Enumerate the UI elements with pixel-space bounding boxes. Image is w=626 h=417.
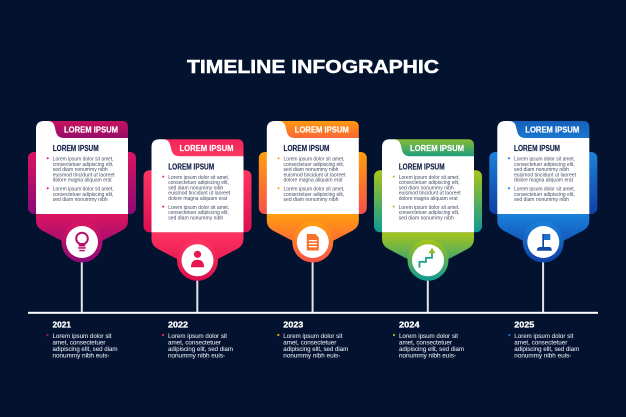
- panel: card 2: [144, 139, 252, 312]
- bullet text 3: consectetuer adipiscing elit,: [284, 192, 344, 198]
- bullet text 4: dolore magna aliquam erat: [399, 196, 458, 202]
- year block 2021: Lorem ipsum dolor sit: [52, 333, 112, 340]
- bullet text 4: [393, 175, 461, 221]
- subheading 1: LOREM IPSUM: [53, 144, 99, 153]
- bullet text 1: consectetuer adipiscing elit,: [53, 192, 113, 198]
- bullet text 1: [47, 157, 115, 203]
- subheading 3: LOREM IPSUM: [284, 144, 330, 153]
- bullet text 2: Lorem ipsum dolor sit amet,: [168, 175, 229, 181]
- year block 2024: nonummy nibh euis-: [399, 352, 456, 359]
- bullet text 2: dolore magna aliquam erat: [168, 196, 228, 202]
- bullet text 2: [162, 175, 231, 221]
- bullet text 5: Lorem ipsum dolor sit amet,: [514, 187, 575, 193]
- year block 2023: 2023: [283, 320, 304, 330]
- lower body 4: [382, 232, 474, 275]
- bullet text 5: consectetuer adipiscing elit,: [514, 192, 575, 198]
- year block 2021: [46, 320, 118, 359]
- icon: light bulb: [62, 222, 102, 262]
- timeline axis: [28, 312, 598, 314]
- year block 2024: adipiscing elit, sed diam: [399, 346, 464, 353]
- year block 2024: Lorem ipsum dolor sit: [399, 333, 458, 340]
- year block 2025: adipiscing elit, sed diam: [514, 346, 579, 353]
- bullet text 4: Lorem ipsum dolor sit amet,: [399, 175, 460, 181]
- year block 2023: Lorem ipsum dolor sit: [283, 333, 343, 340]
- white card 2: [152, 139, 244, 232]
- header label 5: LOREM IPSUM: [525, 125, 579, 135]
- bullet text 2: Lorem ipsum dolor sit amet,: [168, 205, 229, 211]
- year block 2024: amet, consectetuer: [399, 339, 452, 346]
- year block 2023: amet, consectetuer: [283, 339, 336, 346]
- year block 2025: amet, consectetuer: [514, 339, 567, 346]
- year block 2021: amet, consectetuer: [52, 339, 106, 346]
- year block 2025: nonummy nibh euis-: [514, 352, 571, 359]
- header tab 5: [509, 121, 589, 140]
- bullet text 3: sed diam nonummy nibh: [284, 167, 339, 173]
- lower body 5: [497, 214, 589, 257]
- bullet text 2: euismod tincidunt ut laoreet: [168, 191, 231, 197]
- bullet text 1: Lorem ipsum dolor sit amet,: [53, 157, 114, 163]
- side panel 2: [144, 170, 252, 232]
- side panel 4: [374, 170, 482, 232]
- bullet text 5: euismod tincidunt ut laoreet: [514, 172, 577, 178]
- bullet text 1: dolore magna aliquam erat: [53, 178, 112, 184]
- icon: rising stairs arrow: [408, 240, 448, 281]
- bullet text 1: sed diam nonummy nibh: [53, 197, 108, 203]
- header label 3: LOREM IPSUM: [295, 125, 349, 135]
- year block 2022: adipiscing elit, sed diam: [168, 346, 233, 353]
- bullet text 5: consectetuer adipiscing elit,: [514, 162, 575, 168]
- year block 2022: nonummy nibh euis-: [168, 352, 225, 359]
- year block 2024: [393, 320, 464, 359]
- bullet text 1: euismod tincidunt ut laoreet: [53, 172, 115, 178]
- bullet text 2: sed diam nonummy nibh: [168, 185, 223, 191]
- bullet text 3: dolore magna aliquam erat: [284, 178, 343, 184]
- bullet text 1: sed diam nonummy nibh: [53, 167, 108, 173]
- panel: card 3: [259, 121, 367, 312]
- white card 4: [382, 139, 474, 232]
- white card 3: [267, 121, 359, 214]
- bullet text 2: consectetuer adipiscing elit,: [168, 180, 229, 186]
- icon: flag: [523, 222, 564, 262]
- year block 2022: Lorem ipsum dolor sit: [168, 333, 227, 340]
- connector line 4: [427, 276, 429, 312]
- bullet text 3: consectetuer adipiscing elit,: [284, 162, 344, 168]
- title: TIMELINE INFOGRAPHIC: [187, 56, 439, 77]
- white card 5: [497, 121, 589, 214]
- header label 1: LOREM IPSUM: [64, 125, 118, 135]
- header label 2: LOREM IPSUM: [180, 143, 234, 153]
- header tab 2: [164, 139, 244, 158]
- bullet text 3: Lorem ipsum dolor sit amet,: [284, 187, 344, 193]
- year block 2021: 2021: [52, 320, 71, 330]
- subheading 5: LOREM IPSUM: [514, 144, 560, 153]
- bullet text 4: Lorem ipsum dolor sit amet,: [399, 205, 460, 211]
- bullet text 4: euismod tincidunt ut laoreet: [399, 191, 461, 197]
- bullet text 3: sed diam nonummy nibh: [284, 197, 339, 203]
- header tab 4: [394, 139, 474, 158]
- connector line 5: [542, 258, 544, 312]
- year block 2025: Lorem ipsum dolor sit: [514, 333, 574, 340]
- bullet text 3: Lorem ipsum dolor sit amet,: [284, 157, 344, 163]
- year block 2022: 2022: [168, 320, 188, 330]
- header label 4: LOREM IPSUM: [410, 143, 464, 153]
- icon: person: [177, 240, 218, 281]
- year block 2023: adipiscing elit, sed diam: [283, 346, 348, 353]
- side panel 1: [28, 152, 136, 214]
- year block 2021: adipiscing elit, sed diam: [52, 346, 118, 353]
- subheading 4: LOREM IPSUM: [399, 162, 445, 171]
- bullet text 2: sed diam nonummy nibh: [168, 215, 223, 221]
- bullet text 1: Lorem ipsum dolor sit amet,: [53, 187, 114, 193]
- panel: card 1: [28, 121, 136, 312]
- lower body 2: [152, 232, 244, 275]
- bullet text 3: euismod tincidunt ut laoreet: [284, 172, 346, 178]
- bullet text 4: sed diam nonummy nibh: [399, 185, 454, 191]
- year block 2022: [162, 320, 233, 359]
- connector line 3: [312, 258, 314, 312]
- connector line 1: [81, 258, 83, 312]
- bullet text 4: sed diam nonummy nibh: [399, 215, 454, 221]
- bullet text 4: consectetuer adipiscing elit,: [399, 210, 459, 216]
- year block 2023: nonummy nibh euis-: [283, 352, 340, 359]
- connector line 2: [196, 276, 198, 312]
- year block 2024: 2024: [399, 320, 420, 330]
- side panel 5: [489, 152, 597, 214]
- header tab 3: [279, 121, 359, 140]
- panel: card 4: [374, 139, 482, 312]
- year block 2025: 2025: [514, 320, 535, 330]
- white card 1: [36, 121, 128, 214]
- year block 2025: [508, 320, 579, 359]
- bullet text 4: consectetuer adipiscing elit,: [399, 180, 459, 186]
- bullet text 5: Lorem ipsum dolor sit amet,: [514, 157, 575, 163]
- bullet text 3: [278, 157, 346, 203]
- year block 2023: [277, 320, 348, 359]
- subheading 2: LOREM IPSUM: [168, 162, 214, 171]
- bullet text 1: consectetuer adipiscing elit,: [53, 162, 113, 168]
- year block 2022: amet, consectetuer: [168, 339, 221, 346]
- year block 2021: nonummy nibh euis-: [52, 352, 110, 359]
- icon: document: [292, 222, 333, 262]
- bullet text 2: consectetuer adipiscing elit,: [168, 210, 229, 216]
- header tab 1: [48, 121, 128, 140]
- side panel 3: [259, 152, 367, 214]
- panel: card 5: [489, 121, 597, 312]
- lower body 3: [267, 214, 359, 257]
- bullet text 5: sed diam nonummy nibh: [514, 197, 569, 203]
- lower body 1: [36, 214, 128, 257]
- bullet text 5: dolore magna aliquam erat: [514, 178, 573, 184]
- bullet text 5: sed diam nonummy nibh: [514, 167, 569, 173]
- bullet text 5: [508, 157, 577, 203]
